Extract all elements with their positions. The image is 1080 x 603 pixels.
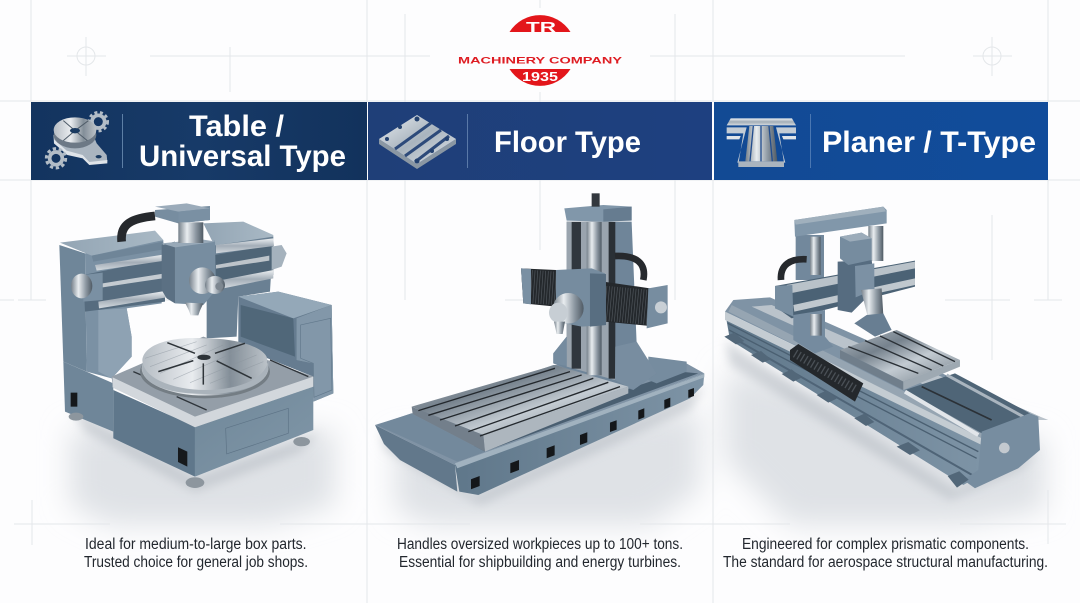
rear column: [207, 237, 273, 338]
icon divider: [810, 114, 811, 168]
top cap: [564, 205, 632, 222]
icon: t-slot plate: [379, 115, 456, 169]
description: Essential for shipbuilding and energy turbines.: [399, 554, 681, 571]
logo: [458, 15, 623, 86]
machine: floor type: [375, 193, 704, 495]
cable loop: [781, 259, 807, 280]
logo top segment: [510, 15, 570, 32]
spindle: [861, 288, 883, 317]
right bellows: [603, 282, 650, 326]
description: Handles oversized workpieces up to 100+ tons.: [397, 536, 683, 553]
left bellows: [521, 268, 556, 307]
icon divider: [122, 114, 123, 168]
heading: Floor Type: [494, 126, 641, 159]
panel: table / universal type: [31, 102, 367, 571]
spindle: [189, 267, 216, 294]
description: The standard for aerospace structural manufacturing.: [723, 554, 1048, 571]
spindle: [553, 293, 584, 324]
heading: Planer / T-Type: [822, 126, 1036, 159]
top of beam: [60, 231, 163, 256]
description: Ideal for medium-to-large box parts.: [85, 536, 306, 553]
description: Engineered for complex prismatic components.: [742, 536, 1029, 553]
base right face: [455, 373, 704, 495]
top beam: [794, 207, 887, 237]
saddle: [556, 268, 606, 327]
heading: Table /: [189, 110, 285, 143]
header bar: [368, 102, 712, 180]
logo company name: MACHINERY COMPANY: [458, 56, 623, 66]
heading second line: Universal Type: [139, 140, 346, 173]
description: [84, 536, 308, 571]
panel: planer / t-type: [714, 102, 1048, 571]
rotary table: [140, 345, 270, 398]
cable chain: [790, 344, 863, 402]
logo year: 1935: [522, 70, 558, 84]
floor reflections: [70, 370, 1045, 525]
slide rails left: [83, 258, 165, 312]
cable chain: [615, 256, 644, 280]
top housing: [155, 206, 210, 223]
cable chain: [121, 216, 155, 242]
silver table top: [112, 337, 313, 427]
description: [723, 536, 1048, 571]
description: [397, 536, 683, 571]
slide rails right: [215, 245, 273, 287]
table: [840, 330, 960, 382]
base: [63, 362, 113, 432]
base top: [375, 362, 704, 465]
icon: rotary table with gears: [46, 112, 108, 168]
uprights lower: [793, 310, 833, 353]
feet: [186, 477, 204, 488]
right cabinet: [238, 292, 333, 402]
machine: planer type: [724, 207, 1048, 488]
base left face: [375, 425, 457, 492]
rear block: [648, 357, 687, 383]
machine: table type: [59, 203, 333, 488]
column: [553, 222, 657, 390]
bed channel: [905, 373, 1030, 433]
saddle: [162, 242, 175, 303]
logo initials: TR: [526, 19, 556, 36]
bed top: [725, 297, 1040, 438]
logo bottom segment: [510, 69, 570, 86]
bed side: [725, 312, 982, 485]
description: Trusted choice for general job shops.: [84, 554, 308, 571]
header bar: [714, 102, 1048, 180]
bed end: [963, 413, 1040, 488]
head: [838, 260, 874, 313]
rectangle sockets: [471, 388, 694, 489]
rear gantry uprights: [796, 226, 883, 280]
left column: [59, 245, 87, 372]
panel: floor type: [368, 102, 712, 571]
left deck: [377, 413, 485, 462]
icon: t-beam: [727, 118, 796, 167]
table: [412, 365, 628, 435]
header bar: [31, 102, 367, 180]
feet: [724, 333, 969, 488]
icon divider: [467, 114, 468, 168]
contact shadows: [70, 340, 1040, 505]
cross rail: [775, 261, 915, 318]
